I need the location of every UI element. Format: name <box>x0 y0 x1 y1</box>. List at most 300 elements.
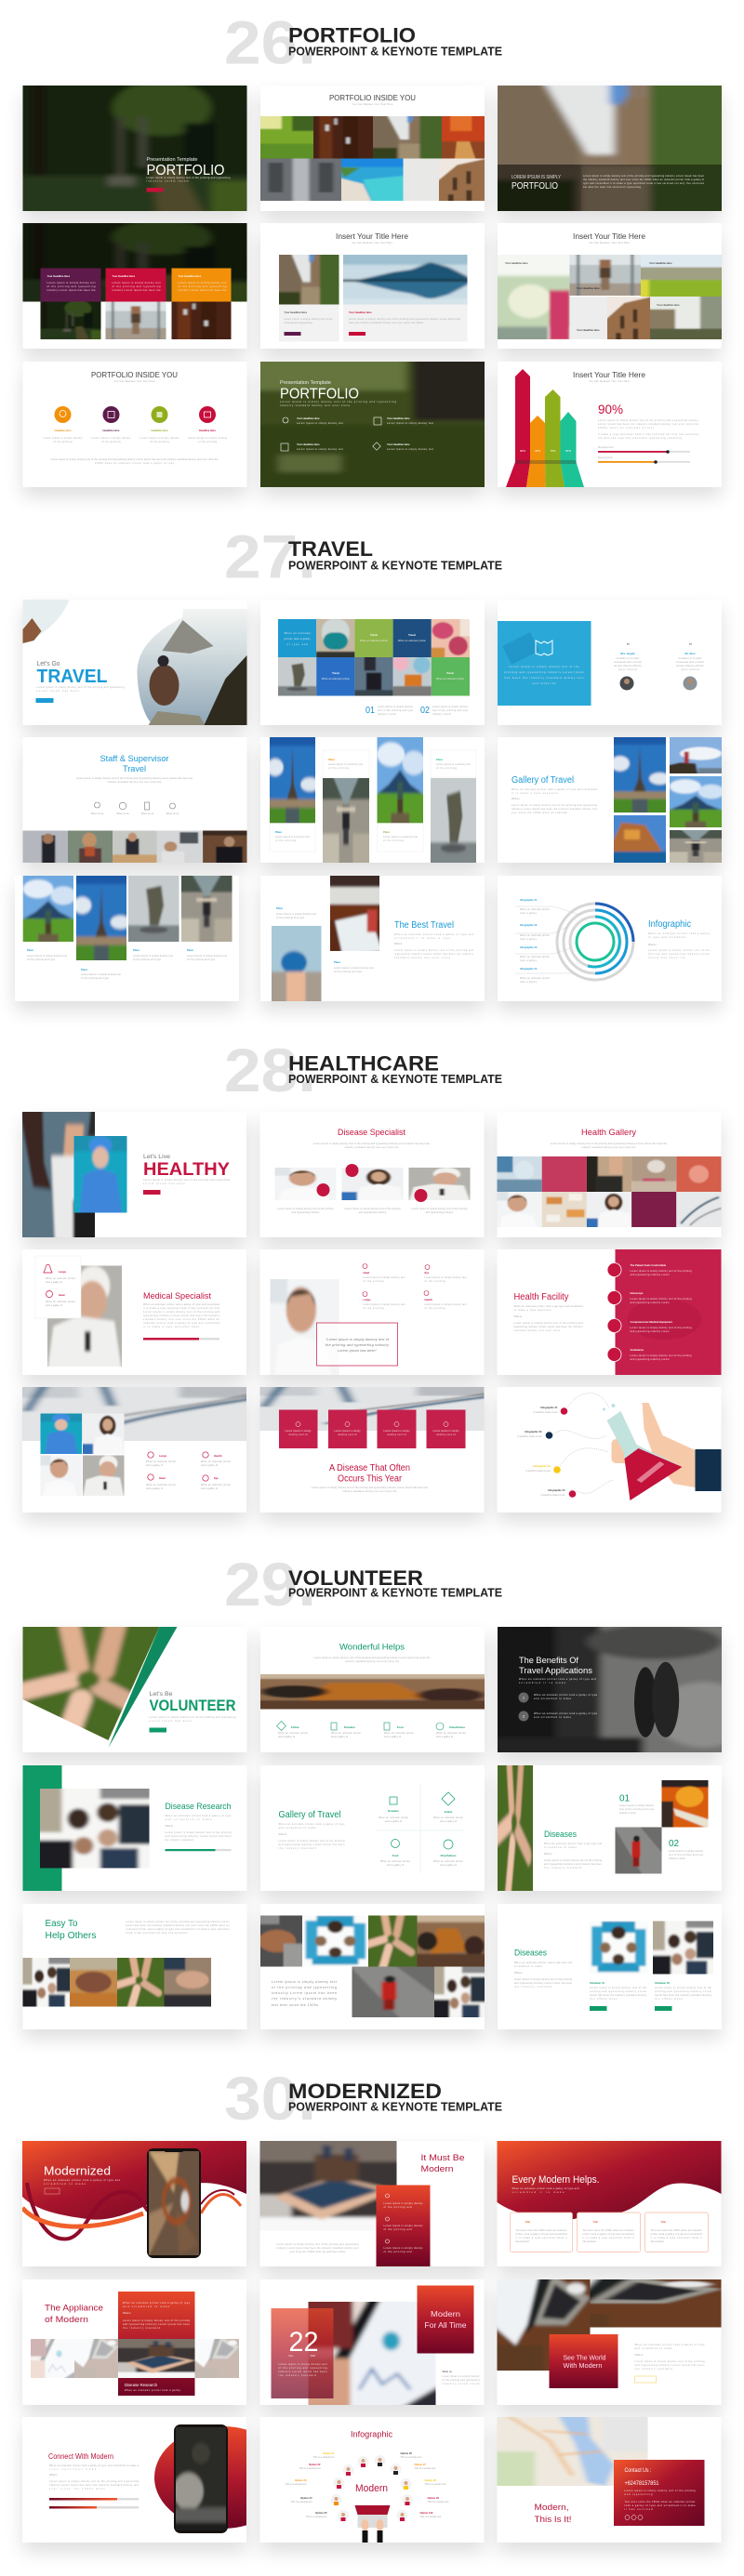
slide: gallery of travel icons <box>260 1765 485 1891</box>
slide: portfolio grass: Presentation Template <box>280 380 331 386</box>
slide: blue square with testimonials: consequat felis ut tortor <box>676 661 704 664</box>
slide: gallery of travel: When an unknown printer took a galley of type and scrambled <box>512 788 598 791</box>
slide: contact us map: This Is It! <box>534 2515 571 2525</box>
slide: medical specialist: it to make a type specimen book <box>143 1326 200 1328</box>
heading: 26 portfolio: POWERPOINT & KEYNOTE TEMPLATE <box>288 45 502 58</box>
slide: modern infographic: This is a sample text <box>286 2483 307 2486</box>
slide: a disease that often occurs <box>260 1387 484 1513</box>
slide: modernized phone cover: When an unknown printer took a galley of type and <box>44 2179 121 2182</box>
heading: 28 healthcare: POWERPOINT & KEYNOTE TEMPLATE <box>288 1073 502 1086</box>
heading: 26 portfolio: 26. <box>224 7 316 76</box>
slide: the benefits of travel applications <box>498 1627 722 1752</box>
slide: health facility: Lorem Ipsum is simply dummy text of the printing <box>631 1270 692 1273</box>
slide: arrows with ninety percent: Lorem Ipsum is simply dummy text of the printing and typesetting industry <box>598 419 699 422</box>
slide: disease specialist: and typesetting industry <box>426 1211 454 1214</box>
slide: place cards with photos: Lorem Ipsum is a dummy text <box>328 763 363 766</box>
slide: three colour headline cards: of the printing and typesetting <box>179 285 227 288</box>
slide: four circle icons: of the printing <box>198 441 218 443</box>
slide: the best travel <box>260 876 485 1001</box>
slide: connect with modern: Lorem Ipsum is simply dummy text of the printing and typesetting <box>49 2480 140 2483</box>
slide: the best travel: Place <box>334 960 341 964</box>
slide: blue square with testimonials: Curabitur et mi dolor <box>679 657 702 660</box>
slide: insert your title faded photos: You Can Replace Your Text Here <box>589 242 631 244</box>
slide: gallery of travel icons: When an unknown printer <box>433 1816 463 1819</box>
heading: 27 travel: POWERPOINT & KEYNOTE TEMPLATE <box>288 560 502 573</box>
slide: ring infographic: Infographic #4 <box>520 967 538 971</box>
slide: modern infographic: Option #2 <box>309 2463 321 2466</box>
slide: connect with modern: What to <box>49 2474 58 2477</box>
heading: 29 volunteer: 29. <box>224 1550 316 1618</box>
slide: disease research: Disease Research <box>166 1802 231 1811</box>
slide: modernized phone cover <box>22 2141 246 2266</box>
slide: four circle icons: Headline Here <box>152 429 168 432</box>
slide: portfolio alley: Lorem Ipsum is simply dummy text of the printing and typesetting industry Lorem Ipsum has been <box>583 175 705 178</box>
slide: health facility: What to <box>513 1315 523 1318</box>
slide: a disease that often occurs: dummy text of <box>288 1433 308 1436</box>
slide: gallery of travel icons: Cheerfulness <box>440 1854 457 1857</box>
slide: wonderful helps: When an unknown printer <box>278 1732 308 1735</box>
slide: modern for all time: What us <box>443 2370 452 2373</box>
slide: gallery of travel: What to <box>512 798 520 800</box>
slide: photo columns with places: Place <box>133 948 140 952</box>
slide: arrows with ninety percent: 50% <box>565 449 571 453</box>
slide: the appliance of modern: and scrambled to make <box>123 2305 170 2308</box>
slide: the benefits of travel applications: 2 <box>523 1714 525 1718</box>
slide: disease research: the industry standard <box>166 1839 193 1842</box>
slide: the best travel: Lorem Ipsum is simply dummy text <box>276 913 316 916</box>
heading: 30 modernized <box>224 2064 502 2133</box>
slide: gallery of travel icons: Food <box>392 1854 399 1857</box>
slide: insert your title faded photos: Your Headline Here <box>649 261 672 265</box>
slide: a disease that often occurs: A Disease That Often <box>329 1463 410 1473</box>
slide: three colour headline cards: Lorem Ipsum is simply dummy text <box>46 282 96 284</box>
slide: a disease that often occurs: dummy text of <box>387 1433 406 1436</box>
slide: hand holding flask infographic: It would be better to put <box>540 1494 565 1497</box>
slide: travel mosaic: 01 <box>365 706 375 716</box>
slide: man with quote frame: of the printing <box>424 1307 445 1310</box>
slide: modern for all time: industry Lorem Ipsum has been <box>279 2371 327 2373</box>
slide: travel mosaic: Lorem Ipsum is simply dummy <box>432 706 469 708</box>
slide: a disease that often occurs: Occurs This Year <box>338 1474 403 1484</box>
slide: blue square with testimonials: Curabitur et mi dolor <box>616 657 640 660</box>
slide: place cards with photos: of the printing <box>275 839 297 842</box>
slide: it must be modern: of the printing and <box>383 2228 412 2231</box>
slide: ring infographic: Ipsum has been the <box>648 957 686 959</box>
slide: the benefits of travel applications: The Benefits Of <box>519 1656 578 1666</box>
slide: hand holding flask infographic: It would be better to put <box>517 1435 542 1438</box>
slide: blue square with testimonials: has been the industry standard dummy text <box>504 677 584 680</box>
slide: place cards with photos: Place <box>328 758 336 761</box>
slide: every modern helps: Text over since the 1500s when an unknown <box>582 2229 634 2232</box>
slide: portfolio grass: Your Headline Here <box>387 416 410 420</box>
slide: health facility: and typesetting industry Lorem <box>631 1274 670 1276</box>
slide: modern infographic: This is a sample text <box>424 2483 446 2486</box>
slide: ring infographic: took a galley <box>520 938 538 941</box>
slide: diseases with two volunteers: Volunteer #1 <box>590 1981 604 1985</box>
slide: disease research: and scrambled to make <box>166 1818 212 1821</box>
slide: modern infographic: Option #5 <box>315 2511 327 2515</box>
slide: man with quote frame: Hearth <box>424 1298 432 1301</box>
slide: blue square with testimonials: " <box>627 643 630 650</box>
slide: the best travel: What to <box>394 943 403 945</box>
heading: 26 portfolio: PORTFOLIO <box>288 24 416 47</box>
slide: gallery of travel icons: took a galley of <box>385 1820 402 1823</box>
heading: 28 healthcare: HEALTHCARE <box>288 1052 439 1075</box>
slide: photo columns with places: of the printing and type <box>81 977 110 980</box>
slide: every modern helps: printer took a galley of type and scrambled <box>515 2233 567 2236</box>
slide: contact us map: Modern, <box>534 2503 569 2513</box>
slide: insert your title two panels: Insert Your Title Here <box>336 232 409 241</box>
slide: every modern helps: printer took a galley of type and scrambled <box>582 2233 634 2236</box>
slide: arrows with ninety percent: You Can Replace Your Text Here <box>589 380 631 383</box>
slide: insert your title two panels: You Can Replace Your Text Here <box>352 242 393 244</box>
slide: modernized phone cover: scrambled to make <box>44 2183 86 2186</box>
slide: portfolio grass: Your Headline Here <box>387 443 410 446</box>
slide: modern infographic: This is a sample text <box>428 2501 449 2503</box>
slide: portfolio alley: but also the leap into electronic typesetting <box>583 186 642 189</box>
slide: four circle icons: Headline Here <box>199 429 216 432</box>
slide: modern for all time: of the printing and typesetting <box>279 2367 327 2370</box>
slide: see the world with modern: and scrambled to make <box>634 2347 672 2350</box>
slide: a disease that often occurs: dummy text of <box>339 1433 357 1436</box>
slide: disease specialist: Lorem Ipsum is simply dummy text of the printing <box>344 1208 401 1210</box>
slide: ring infographic <box>498 876 722 1001</box>
slide: it must be modern: of the printing and <box>383 2251 412 2253</box>
slide: modern infographic: This is a sample text <box>420 2516 442 2518</box>
heading: 29 volunteer: VOLUNTEER <box>288 1566 423 1590</box>
slide: the appliance of modern: The Appliance <box>45 2304 103 2314</box>
slide: see the world with modern: the industry standard <box>634 2368 672 2371</box>
slide: health facility: to make a type specimen <box>513 1309 551 1312</box>
slide: arrows with ninety percent: 40% <box>535 449 540 453</box>
slide: insert your title two panels: Lorem Ipsum is simply dummy text of the <box>285 318 333 321</box>
slide: hand holding flask infographic: Infographic #1 <box>540 1406 558 1409</box>
slide: medical specialist <box>22 1249 246 1375</box>
slide: ring infographic: Infographic <box>648 919 691 930</box>
slide: ring infographic: took a galley <box>520 959 538 962</box>
slide: diseases with fire and climber: 02 <box>669 1839 680 1849</box>
slide: the appliance of modern: Lorem Ipsum is simply dummy text of the printing <box>123 2319 191 2322</box>
slide: travel mosaic: 02 <box>420 706 430 716</box>
slide: the benefits of travel applications: When an unknown printer took a galley of type and <box>519 1678 597 1681</box>
slide: staff and supervisor <box>22 737 247 863</box>
slide: man with quote frame: of the printing <box>363 1280 384 1283</box>
slide: diseases with two volunteers <box>498 1904 722 2029</box>
slide: health facility: and typesetting industry Lorem <box>631 1301 670 1304</box>
slide: diseases with two volunteers: Ipsum has been the industry standard dummy <box>590 1994 647 1997</box>
slide: gallery of travel icons: What to <box>279 1833 287 1836</box>
slide: contact us map: it has survived <box>625 2508 653 2511</box>
slide: the appliance of modern: When an unknown printer took a galley <box>125 2389 181 2392</box>
slide: wonderful helps: Lorem Ipsum is simply dummy text of the printing and typesetting industry Lorem Ipsum has been the <box>314 1657 431 1659</box>
slide: arrows with ninety percent: Management <box>598 446 614 449</box>
slide: man with quote frame: Lorem Ipsum is simply dummy text <box>363 1303 405 1306</box>
slide: diseases with fire and climber <box>498 1765 722 1891</box>
slide: stethoscope with team photos: Eye <box>214 1476 219 1480</box>
slide: the appliance of modern: When an unknown printer took a galley of type <box>123 2302 191 2305</box>
slide: medical specialist: unknown printer took a galley of type and scrambled <box>143 1322 220 1325</box>
slide: wonderful helps <box>260 1631 485 1752</box>
slide: wonderful helps: took a galley of <box>436 1736 453 1738</box>
slide: four circle icons: of the printing <box>102 441 121 443</box>
slide: man with quote frame: Lorem Ipsum has been" <box>338 1349 378 1353</box>
slide: travel mosaic: Travel <box>408 633 416 637</box>
slide: travel mosaic: When an unknown printer <box>398 640 426 642</box>
slide: arrows with ninety percent: 1500s when an unknown printer <box>598 427 654 429</box>
slide: photo columns with places: Lorem Ipsum is simply dummy text <box>187 955 227 958</box>
slide: portfolio grass: industry standard dummy text ever since <box>280 404 351 407</box>
slide: place cards with photos: Place <box>275 830 283 834</box>
slide: health gallery: Health Gallery <box>581 1128 636 1138</box>
slide: four circle icons: Headline Here <box>103 429 120 432</box>
slide: the appliance of modern: What to <box>123 2312 131 2315</box>
slide: wonderful helps: Wonderful Helps <box>339 1642 405 1653</box>
slide: diseases with fire and climber: scrambled to make <box>544 1846 578 1849</box>
heading: 30 modernized: POWERPOINT & KEYNOTE TEMPLATE <box>288 2101 502 2114</box>
slide: photo columns with places: Lorem Ipsum is simply dummy text <box>27 955 67 958</box>
slide: lets be volunteer <box>22 1627 247 1752</box>
slide: health facility: Lorem Ipsum is simply dummy text of the printing and <box>513 1322 583 1325</box>
slide: blue square with testimonials: tempus Mauris efficitur <box>676 665 704 667</box>
slide: volunteer photo gallery: the industry's standard dummy <box>272 1997 337 2001</box>
slide: portfolio forest cover: Presentation Template <box>147 157 198 163</box>
slide: every modern helps: Text over since the 1500s when an unknown <box>515 2229 567 2232</box>
slide: portfolio grass: Lorem Ipsum is simply dummy text of the printing and typesetting <box>280 401 397 403</box>
slide: travel mosaic: printer took a galley <box>285 638 311 641</box>
slide: every modern helps: Title <box>660 2220 666 2224</box>
slide: connect with modern: When an unknown printer took a galley of type and scrambled to make a <box>49 2464 140 2467</box>
section: portfolio <box>0 7 744 500</box>
slide: photo columns with places: Lorem Ipsum is simply dummy text <box>81 973 121 976</box>
slide: diseases with fire and climber: 01 <box>619 1794 631 1803</box>
slide: the appliance of modern: Disease Research <box>125 2383 157 2387</box>
slide: every modern helps: Title <box>593 2220 598 2224</box>
slide: portfolio inside you mosaic: You Can Replace Your Text Here <box>352 103 393 106</box>
slide: modern infographic: This is a sample text <box>313 2456 335 2459</box>
slide: portfolio forest cover: Lorem Ipsum is simply dummy text of the printing and typesetting <box>147 177 231 179</box>
slide: portfolio inside you mosaic: PORTFOLIO INSIDE YOU <box>329 94 416 102</box>
slide: diseases with fire and climber: text of the printing and type <box>669 1854 704 1856</box>
slide: place cards with photos: Place <box>436 758 444 761</box>
slide: health facility: Comprehensive Medical Equipment <box>631 1320 672 1324</box>
slide: health facility: and typesetting industry Lorem <box>631 1358 670 1361</box>
slide: portfolio grass: Your Headline Here <box>297 443 320 446</box>
slide: the best travel: Place <box>276 906 284 910</box>
slide: it must be modern <box>260 2141 484 2266</box>
slide: travel mosaic: of type and <box>287 643 308 646</box>
slide: blue square with testimonials <box>498 602 722 725</box>
slide: wonderful helps: industry standard dummy text ever since the <box>345 1660 400 1663</box>
slide: diseases with fire and climber: When an unknown printer took a gal type and <box>544 1843 603 1845</box>
slide: lets live healthy: Lorem Ipsum is simply dummy text of the printing and typesetting <box>143 1179 231 1182</box>
slide: modern for all time <box>260 2279 484 2405</box>
slide: staff and supervisor: industry standard dummy text ever since the <box>108 781 162 784</box>
heading: 26 portfolio <box>224 7 502 76</box>
slide: diseases with two volunteers: Ipsum has been the industry standard dummy <box>655 1994 712 1997</box>
slide: four circle icons <box>22 362 247 487</box>
slide: connect with modern: Connect With Modern <box>48 2452 113 2461</box>
slide: see the world with modern: With Modern <box>564 2363 603 2370</box>
slide: disease research: Lorem Ipsum is simply dummy text of the printing <box>166 1831 232 1834</box>
slide: see the world with modern: What to <box>634 2354 644 2357</box>
slide: a disease that often occurs: Lorem Ipsum is simply <box>383 1430 410 1433</box>
slide: place cards with photos: Lorem Ipsum is a dummy text <box>275 836 310 839</box>
slide: diseases with two volunteers: Volunteer #2 <box>655 1981 670 1985</box>
slide: gallery of travel: industry Lorem Ipsum has been the industry standard dummy text <box>512 808 597 811</box>
slide: diseases with fire and climber: Lorem Ipsum is simply dummy <box>619 1804 655 1807</box>
slide: travel mosaic: industry Lorem <box>432 713 451 716</box>
slide: the appliance of modern <box>22 2279 246 2405</box>
slide: medical specialist: typesetting industry Lorem Ipsum has been the industry <box>143 1314 220 1317</box>
slide: blue square with testimonials: Mr. Jhon <box>684 652 696 655</box>
slide: ring infographic: Lorem Ipsum is simply dummy text of the <box>648 949 711 952</box>
slide: wonderful helps: took a galley of <box>331 1736 348 1738</box>
slide: staff and supervisor: Staff & Supervisor <box>100 754 169 764</box>
slide: modern infographic: Option #8 <box>424 2478 436 2482</box>
slide: modern infographic: This is a sample text <box>291 2501 312 2503</box>
slide: disease research: When an unknown printer took a galley of type <box>166 1815 232 1817</box>
slide: stethoscope with team photos: When an unknown printer <box>201 1460 231 1463</box>
slide: disease specialist <box>260 1116 484 1237</box>
slide: contact us map: Text over since the 1500s when an unknown printer <box>625 2501 696 2503</box>
slide: insert your title two panels: Lorem Ipsum is simply dummy text of the printing and typesetting industry Lorem Ipsum has <box>349 318 461 321</box>
slide: arrows with ninety percent: It make a type specimen book it has survived not only five centuries <box>598 433 699 436</box>
slide: volunteer photo gallery: of the printing and typesetting <box>272 1986 337 1989</box>
slide: diseases with two volunteers: Lorem Ipsum is simply dummy text of the <box>655 1987 712 1989</box>
slide: disease specialist: Disease Specialist <box>338 1128 405 1138</box>
slide: medical specialist: took a galley of <box>46 1281 62 1284</box>
slide: modern for all time: 2018 <box>311 2355 316 2358</box>
slide: the benefits of travel applications: scrambled it to make <box>519 1682 566 1684</box>
slide: volunteer photo gallery: industry Lorem Ipsum has been <box>272 1991 337 1995</box>
heading: 27 travel <box>224 522 502 590</box>
slide: stethoscope with team photos: took a galley of <box>201 1464 218 1467</box>
slide: disease specialist: Lorem Ipsum is simply dummy text of the printing <box>277 1208 334 1210</box>
slide: four circle icons: Lorem Ipsum is simply dummy <box>91 437 131 440</box>
slide: the best travel: of the printing and type <box>276 917 305 919</box>
slide: portfolio grass: Your Headline Here <box>297 416 320 420</box>
slide: blue square with testimonials: consequat felis ut tortor <box>614 661 642 664</box>
slide: gallery of travel icons: Follow <box>445 1810 453 1814</box>
slide: gallery of travel icons: and scrambled to make <box>279 1827 316 1830</box>
slide: photo columns with places: Place <box>81 968 88 971</box>
slide: medical specialist: Lungs <box>59 1270 67 1274</box>
slide: health facility: standard dummy text ever since <box>513 1329 561 1332</box>
slide: wonderful helps: Follow <box>291 1725 299 1729</box>
slide: wonderful helps: took a galley of <box>384 1736 401 1738</box>
slide: modern infographic: Option #1 <box>323 2451 335 2455</box>
slide: lets go travel: Lorem Ipsum is simply dummy text of the printing and typesetting <box>37 686 125 689</box>
slide: every modern helps: printer took a galley of type and scrambled <box>651 2233 702 2236</box>
heading: 30 modernized: 30. <box>224 2064 316 2133</box>
slide: diseases with fire and climber: Lorem Ipsum is simply dummy text of the printing <box>544 1859 603 1862</box>
slide: three colour headline cards: Lorem Ipsum is simply dummy text <box>112 282 161 284</box>
slide: arrows with ninety percent: 70% <box>550 449 556 453</box>
slide: lets be volunteer: Let's Be <box>149 1691 173 1698</box>
slide: portfolio alley: LOREM IPSUM IS SIMPLY <box>512 175 562 180</box>
slide: medical specialist: took a galley of <box>46 1304 62 1307</box>
slide: four circle icons: You Can Replace Your Text Here <box>113 380 155 383</box>
slide: the benefits of travel applications: When an unknown printer took a galley of type <box>534 1694 598 1697</box>
slide: diseases with fire and climber: text of the printing and type <box>619 1808 655 1811</box>
slide: wonderful helps: Food <box>397 1725 404 1729</box>
slide: portfolio grass: PORTFOLIO <box>280 387 359 402</box>
slide: three colour headline cards: Your Headline Here <box>112 274 136 278</box>
slide: lets be volunteer: Lorem Ipsum has been <box>149 1720 192 1723</box>
slide: the benefits of travel applications: 1 <box>523 1696 525 1699</box>
slide: contact us map: and typesetting <box>625 2493 653 2496</box>
slide: gallery of travel icons: Lorem Ipsum is simply dummy text of the printing <box>279 1840 345 1843</box>
slide: modern infographic: Infographic <box>351 2430 393 2439</box>
slide: insert your title faded photos: Your Headline Here <box>577 286 600 290</box>
slide: portfolio alley <box>498 86 722 211</box>
slide: portfolio grass: Lorem Ipsum is simply dummy text <box>387 422 433 425</box>
slide: it must be modern: Lorem Ipsum is simply dummy text of the printing and typesetting <box>277 2243 359 2246</box>
slide: stethoscope with team photos: took a galley of <box>146 1487 163 1490</box>
slide: health facility: and typesetting industry Lorem <box>631 1330 670 1333</box>
slide: connect with modern <box>22 2417 290 2543</box>
slide: easy to help others: Help Others <box>45 1931 97 1941</box>
slide: three colour headline cards: of the printing and typesetting <box>112 285 161 288</box>
slide: insert your title faded photos <box>498 223 722 349</box>
slide: health facility <box>497 1249 722 1375</box>
slide: diseases with fire and climber: industry Lorem <box>669 1857 685 1860</box>
slide: place cards with photos: Lorem Ipsum is a dummy text <box>436 763 471 766</box>
slide: disease research: and typesetting industry Lorem Ipsum has been <box>166 1835 232 1838</box>
slide: it must be modern: Lorem Ipsum is simply dummy <box>383 2247 423 2250</box>
slide: ring infographic: took a galley <box>520 981 538 984</box>
slide: diseases with two volunteers: the 1500s when <box>655 1998 684 2001</box>
slide: diseases with fire and climber: Lorem Ipsum is simply dummy <box>669 1850 704 1853</box>
slide: man with quote frame: Lorem Ipsum is simply dummy text <box>424 1276 467 1279</box>
slide: gallery of travel: ever since the 1500s when an unknown <box>512 812 568 814</box>
slide: travel mosaic: When an unknown printer <box>322 678 350 680</box>
section: modernized <box>22 2064 744 2552</box>
slide: man with quote frame <box>260 1249 484 1375</box>
slide: it must be modern: It Must Be <box>420 2153 465 2163</box>
slide: staff and supervisor: When on an <box>166 812 179 815</box>
slide: ring infographic: When an unknown printer took a galley <box>648 932 711 935</box>
slide: blue square with testimonials: Lorem Ipsum is simply dummy text of the <box>510 666 579 668</box>
slide: travel mosaic: text of the printing and type <box>432 709 469 712</box>
slide: modern for all time: the industry standard <box>279 2374 316 2377</box>
heading: 29 volunteer: POWERPOINT & KEYNOTE TEMPLATE <box>288 1586 502 1599</box>
slide: diseases with two volunteers: Lorem Ipsum is simply dummy text of the printing <box>514 1978 573 1981</box>
slide: gallery of travel: Gallery of Travel <box>512 775 574 786</box>
slide: modern for all time: Lorem Ipsum is simply dummy <box>443 2375 480 2378</box>
slide: easy to help others: unknown printer took a galley of type and scrambled it to make a type specimen <box>126 1928 230 1931</box>
slide: easy to help others <box>22 1904 247 2029</box>
slide: it must be modern: industry Lorem Ipsum has been the industry standard dummy text <box>276 2247 359 2250</box>
slide: travel mosaic: Travel <box>446 671 454 675</box>
slide: gallery of travel icons: When an unknown printer <box>380 1860 410 1863</box>
slide: ring infographic: When an unknown printer <box>520 977 550 980</box>
slide: health gallery: Lorem Ipsum is simply dummy text of the printing and typesetting industry Lorem Ipsum has been the <box>551 1143 668 1145</box>
slide: diseases with two volunteers: printing and typesetting industry Lorem <box>655 1990 711 1993</box>
slide: health facility: When an unknown printer took a gal type and scrambled <box>513 1305 583 1308</box>
slide: photo columns with places <box>15 876 239 1001</box>
slide: place cards with photos: of the printing <box>436 767 458 770</box>
slide: easy to help others: Lorem Ipsum is simply dummy text of the printing and typesetting industry Lorem <box>126 1921 229 1923</box>
slide: stethoscope with team photos: took a galley of <box>201 1487 218 1490</box>
slide: every modern helps: scrambled it to make <box>512 2191 565 2194</box>
slide: see the world with modern: When an unknown printer took a galley of type <box>634 2344 705 2346</box>
slide: gallery of travel icons: the industry standard <box>279 1847 316 1850</box>
slide: a disease that often occurs: industry standard dummy text ever since the <box>342 1490 397 1493</box>
slide: health facility: Lorem Ipsum is simply dummy text of the printing <box>631 1327 692 1329</box>
slide: lets go travel <box>22 600 247 725</box>
slide: the benefits of travel applications: Travel Applications <box>519 1666 592 1676</box>
